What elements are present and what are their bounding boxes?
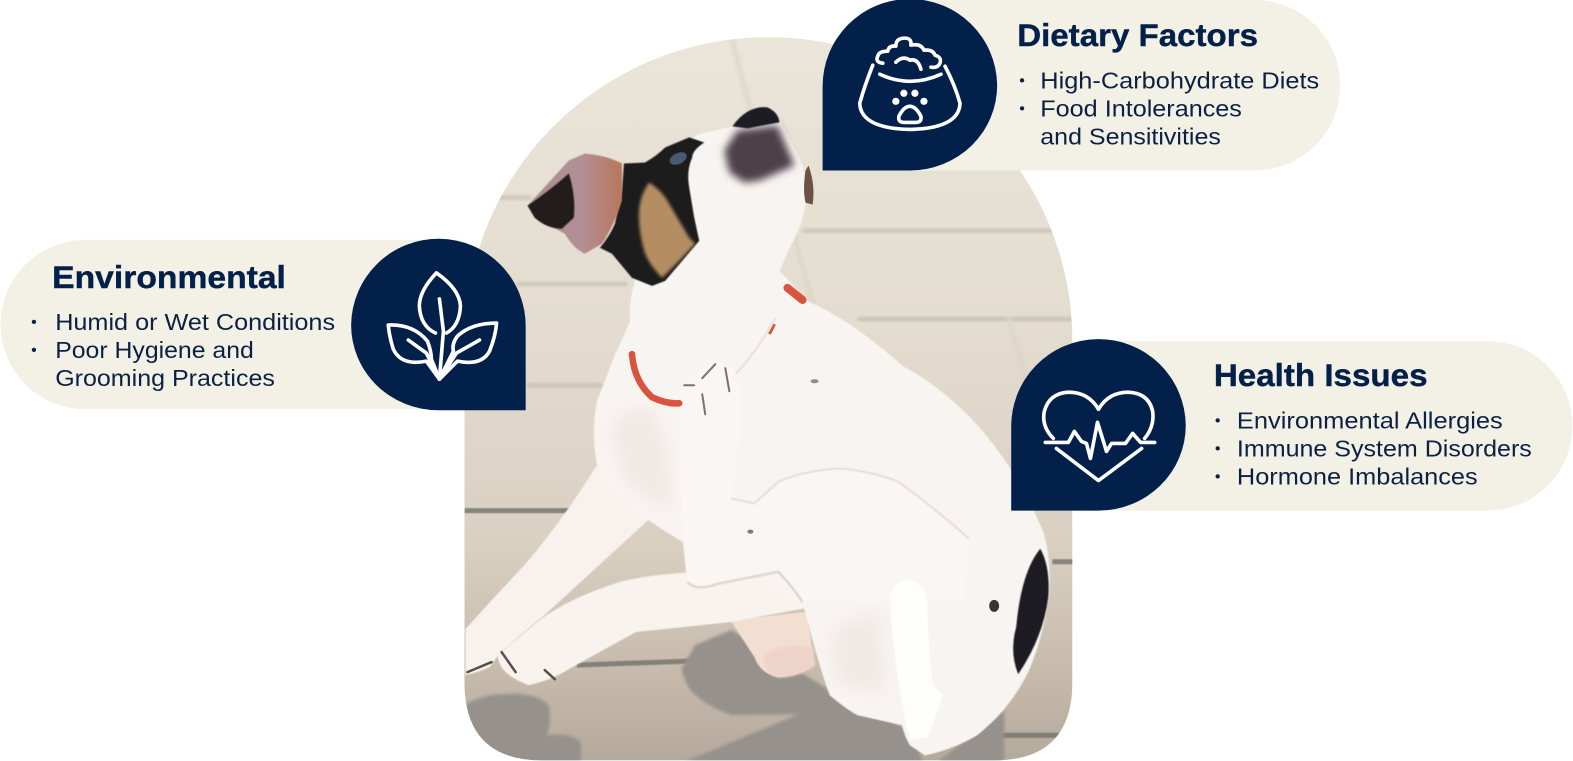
paw fold line	[735, 318, 775, 374]
heading: Dietary Factors	[1017, 18, 1258, 53]
near front leg (back one)	[465, 451, 654, 675]
panel: health issues	[1011, 339, 1572, 511]
second front leg	[498, 567, 808, 685]
list: •	[1019, 71, 1025, 89]
pill background	[1098, 341, 1572, 511]
dog	[465, 107, 1050, 755]
far ear tip	[804, 166, 813, 205]
list: High-Carbohydrate Diets	[1040, 67, 1319, 93]
pill background	[1, 240, 438, 409]
list: Food Intolerances	[1040, 95, 1242, 121]
heading: Environmental	[52, 260, 286, 295]
tan cheek	[639, 183, 695, 278]
icon: food bowl with paw	[860, 38, 960, 129]
pill background	[910, 0, 1340, 171]
black head patch	[600, 137, 704, 286]
list	[31, 309, 335, 391]
list: •	[1215, 411, 1220, 429]
list: Hormone Imbalances	[1237, 464, 1478, 490]
list: Immune System Disorders	[1237, 435, 1532, 461]
black hip spot	[1013, 549, 1049, 674]
list: •	[31, 341, 37, 359]
list: and Sensitivities	[1040, 123, 1221, 149]
list: •	[31, 313, 37, 331]
heading: Health Issues	[1214, 358, 1428, 393]
photo: dog scratching its neck on pavement	[464, 37, 1074, 761]
toes on paws	[467, 364, 729, 679]
scratching leg	[682, 468, 970, 602]
list: Poor Hygiene and	[55, 337, 254, 363]
ear	[528, 153, 622, 254]
navy icon badge	[823, 0, 997, 171]
list	[1215, 407, 1532, 490]
list: •	[1215, 439, 1220, 457]
list	[1019, 67, 1319, 149]
tail	[890, 579, 943, 739]
body shading	[618, 414, 878, 684]
navy icon badge	[351, 239, 526, 410]
panel: dietary factors	[823, 0, 1340, 171]
list: Humid or Wet Conditions	[55, 309, 335, 335]
main body and head	[594, 107, 1050, 755]
list: Grooming Practices	[55, 365, 275, 391]
panel: environmental	[1, 239, 526, 410]
eye	[670, 152, 687, 165]
hind foot	[730, 612, 815, 677]
list: •	[1019, 99, 1025, 117]
navy icon badge	[1011, 339, 1186, 511]
muzzle and nose	[724, 125, 795, 183]
pavement background	[464, 37, 1074, 761]
red collar	[632, 354, 679, 403]
icon: heart with pulse line	[1044, 392, 1155, 481]
icon: three-leaf plant	[388, 273, 497, 379]
list: •	[1215, 468, 1220, 486]
list: Environmental Allergies	[1237, 407, 1503, 433]
ground shadows	[464, 630, 1004, 761]
